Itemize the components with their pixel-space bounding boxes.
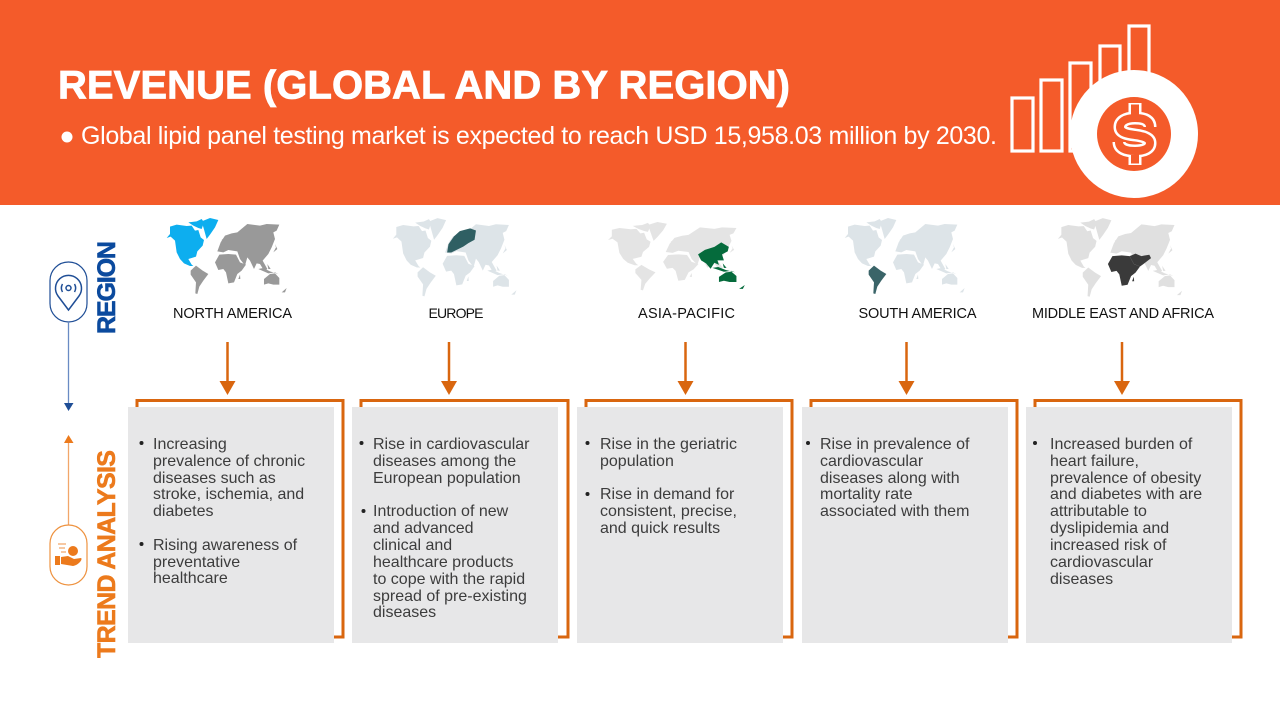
map: middle east and africa [1058,218,1182,297]
panel: south america trends: cardiovascular [820,453,924,470]
panel: north america trends: prevalence of chronic [153,453,305,470]
panel: north america trends [128,400,343,643]
panel: middle east and africa trends: attributable to [1050,503,1147,520]
map: asia-pacific [608,222,745,290]
panel: europe trends: Rise in cardiovascular [373,436,530,453]
panel: middle east and africa trends: cardiovascular [1050,554,1154,571]
panel: north america trends: stroke, ischemia, and [153,486,304,503]
arrow: trend up [64,435,74,525]
panel: north america trends: diabetes [153,503,214,520]
label: north america: NORTH AMERICA [173,306,292,322]
icon: location pin pill [50,262,87,322]
panel: europe trends: and advanced [373,520,474,537]
panel: south america trends: associated with them [820,503,969,520]
panel: middle east and africa trends: and diabetes with are [1050,486,1202,503]
panel: europe trends: European population [373,470,521,487]
panel: europe trends [352,400,568,643]
panel: asia-pacific trends: Rise in demand for [600,486,735,503]
panel: middle east and africa trends: prevalence of obesity [1050,470,1201,487]
label: middle east and africa: MIDDLE EAST AND AFRICA [1032,306,1214,322]
heading: trend analysis: TREND ANALYSIS [93,450,121,658]
panel: middle east and africa trends [1026,400,1241,643]
panel: middle east and africa trends: diseases [1050,571,1113,588]
label: south america: SOUTH AMERICA [858,306,977,322]
panel: north america trends: diseases such as [153,470,276,487]
map: south america [845,218,965,294]
icon: revenue bars and dollar coin [1012,26,1198,198]
heading: region: REGION [93,241,121,334]
panel: south america trends [802,400,1017,643]
panel: south america trends: diseases along with [820,470,960,487]
title: REVENUE (GLOBAL AND BY REGION) [58,64,790,108]
arrow: middle east and africa [1114,342,1130,395]
panel: middle east and africa trends: increased risk of [1050,537,1167,554]
panel: north america trends: preventative [153,554,240,571]
panel: north america trends: Increasing [153,436,227,453]
panel: asia-pacific trends: and quick results [600,520,720,537]
panel: south america trends: mortality rate [820,486,913,503]
panel: europe trends: diseases among the [373,453,516,470]
arrow: north america [220,342,236,395]
subtitle: Global lipid panel testing market is expected to reach USD 15,958.03 million by 2030. [81,122,997,150]
panel: asia-pacific trends: consistent, precise, [600,503,737,520]
map: north america [167,218,287,294]
panel: europe trends: spread of pre-existing [373,588,527,605]
panel: europe trends: to cope with the rapid [373,571,525,588]
panel: north america trends: Rising awareness of [153,537,298,554]
panel: europe trends: healthcare products [373,554,514,571]
header banner [0,0,1280,205]
icon: healthcare hand pill [50,525,87,585]
panel: middle east and africa trends: dyslipidemia and [1050,520,1169,537]
panel: europe trends: diseases [373,604,436,621]
arrow: south america [898,342,914,395]
map: europe [393,218,516,296]
panel: asia-pacific trends [577,400,792,643]
panel: asia-pacific trends: Rise in the geriatric [600,436,737,453]
panel: north america trends: healthcare [153,570,228,587]
panel: middle east and africa trends: Increased burden of [1050,436,1193,453]
arrow: asia-pacific [678,342,694,395]
label: europe: EUROPE [428,305,484,321]
panel: europe trends: clinical and [373,537,452,554]
panel: asia-pacific trends: population [600,453,674,470]
label: asia-pacific: ASIA-PACIFIC [638,306,735,322]
panel: middle east and africa trends: heart failure, [1050,453,1139,470]
panel: europe trends: Introduction of new [373,503,509,520]
arrow: region down [64,322,74,411]
panel: south america trends: Rise in prevalence of [820,436,970,453]
arrow: europe [441,342,457,395]
